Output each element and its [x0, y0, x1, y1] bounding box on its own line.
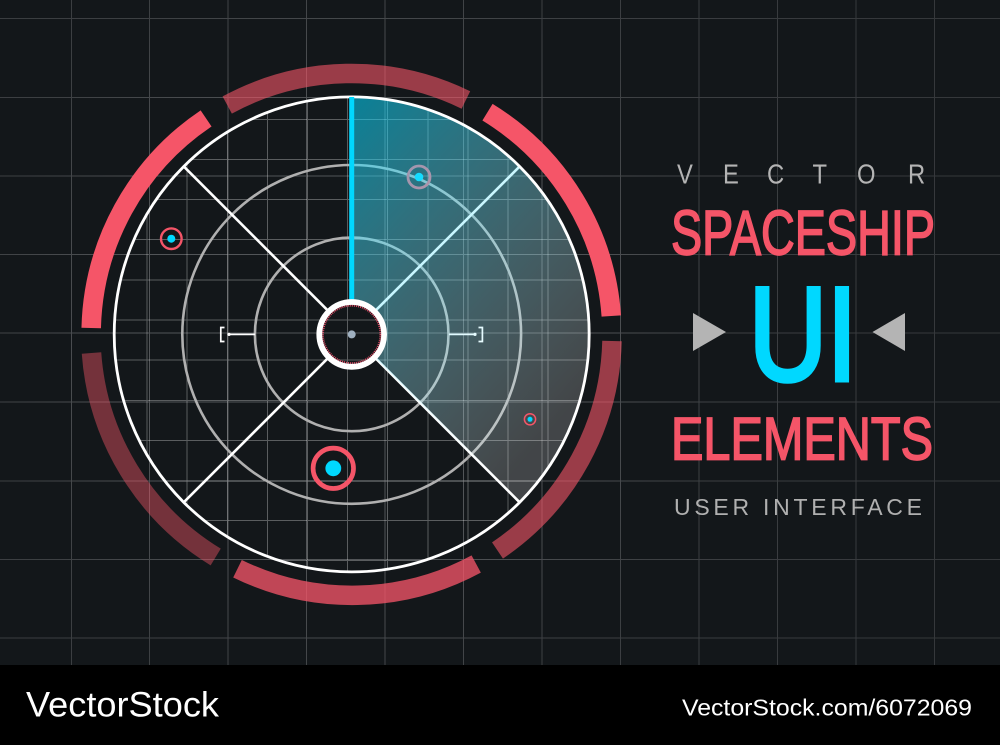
target ring under sweep: [408, 166, 430, 188]
cyan sweep line: [349, 97, 354, 303]
footer brand: VectorStock: [26, 686, 220, 725]
right bracket: [449, 328, 482, 342]
radar display: [110, 90, 595, 580]
outer radar ring: [114, 97, 589, 572]
diagonal spokes: [184, 167, 519, 502]
arc: upper right bright: [488, 112, 611, 316]
arc: upper left bright: [91, 118, 206, 328]
bracket end dots: [227, 333, 477, 336]
radar inner grid: [110, 90, 595, 580]
footer image id: VectorStock.com/6072069: [682, 695, 972, 721]
hub white ring: [319, 302, 384, 367]
target: left: [161, 228, 182, 249]
title block: [671, 157, 935, 520]
target: upper sweep dot: [415, 173, 423, 181]
heading: elements: ELEMENTS: [671, 406, 933, 472]
arc: lower right dim: [498, 341, 612, 550]
arrow: right triangle: [872, 313, 905, 351]
arc: bottom medium: [238, 564, 476, 595]
footer bar: [0, 665, 1000, 745]
center hub: [319, 302, 384, 367]
left bracket: [221, 328, 255, 342]
hub pink tick ring: [323, 306, 381, 363]
hub center dot: [348, 330, 356, 338]
radar sweep sector: [352, 97, 589, 502]
heading: vector: VECTOR: [677, 157, 925, 190]
arc: lower left dim: [92, 353, 216, 557]
outer segmented arcs: [91, 73, 612, 595]
subheading: user interface: USER INTERFACE: [674, 494, 922, 520]
arrow: left triangle: [693, 313, 726, 351]
range rings: [182, 165, 521, 504]
target: small right: [524, 414, 536, 425]
heading: UI: UI: [749, 261, 857, 409]
target: large bottom: [313, 448, 353, 488]
range brackets: [221, 328, 482, 342]
arc: top dim: [227, 73, 466, 105]
